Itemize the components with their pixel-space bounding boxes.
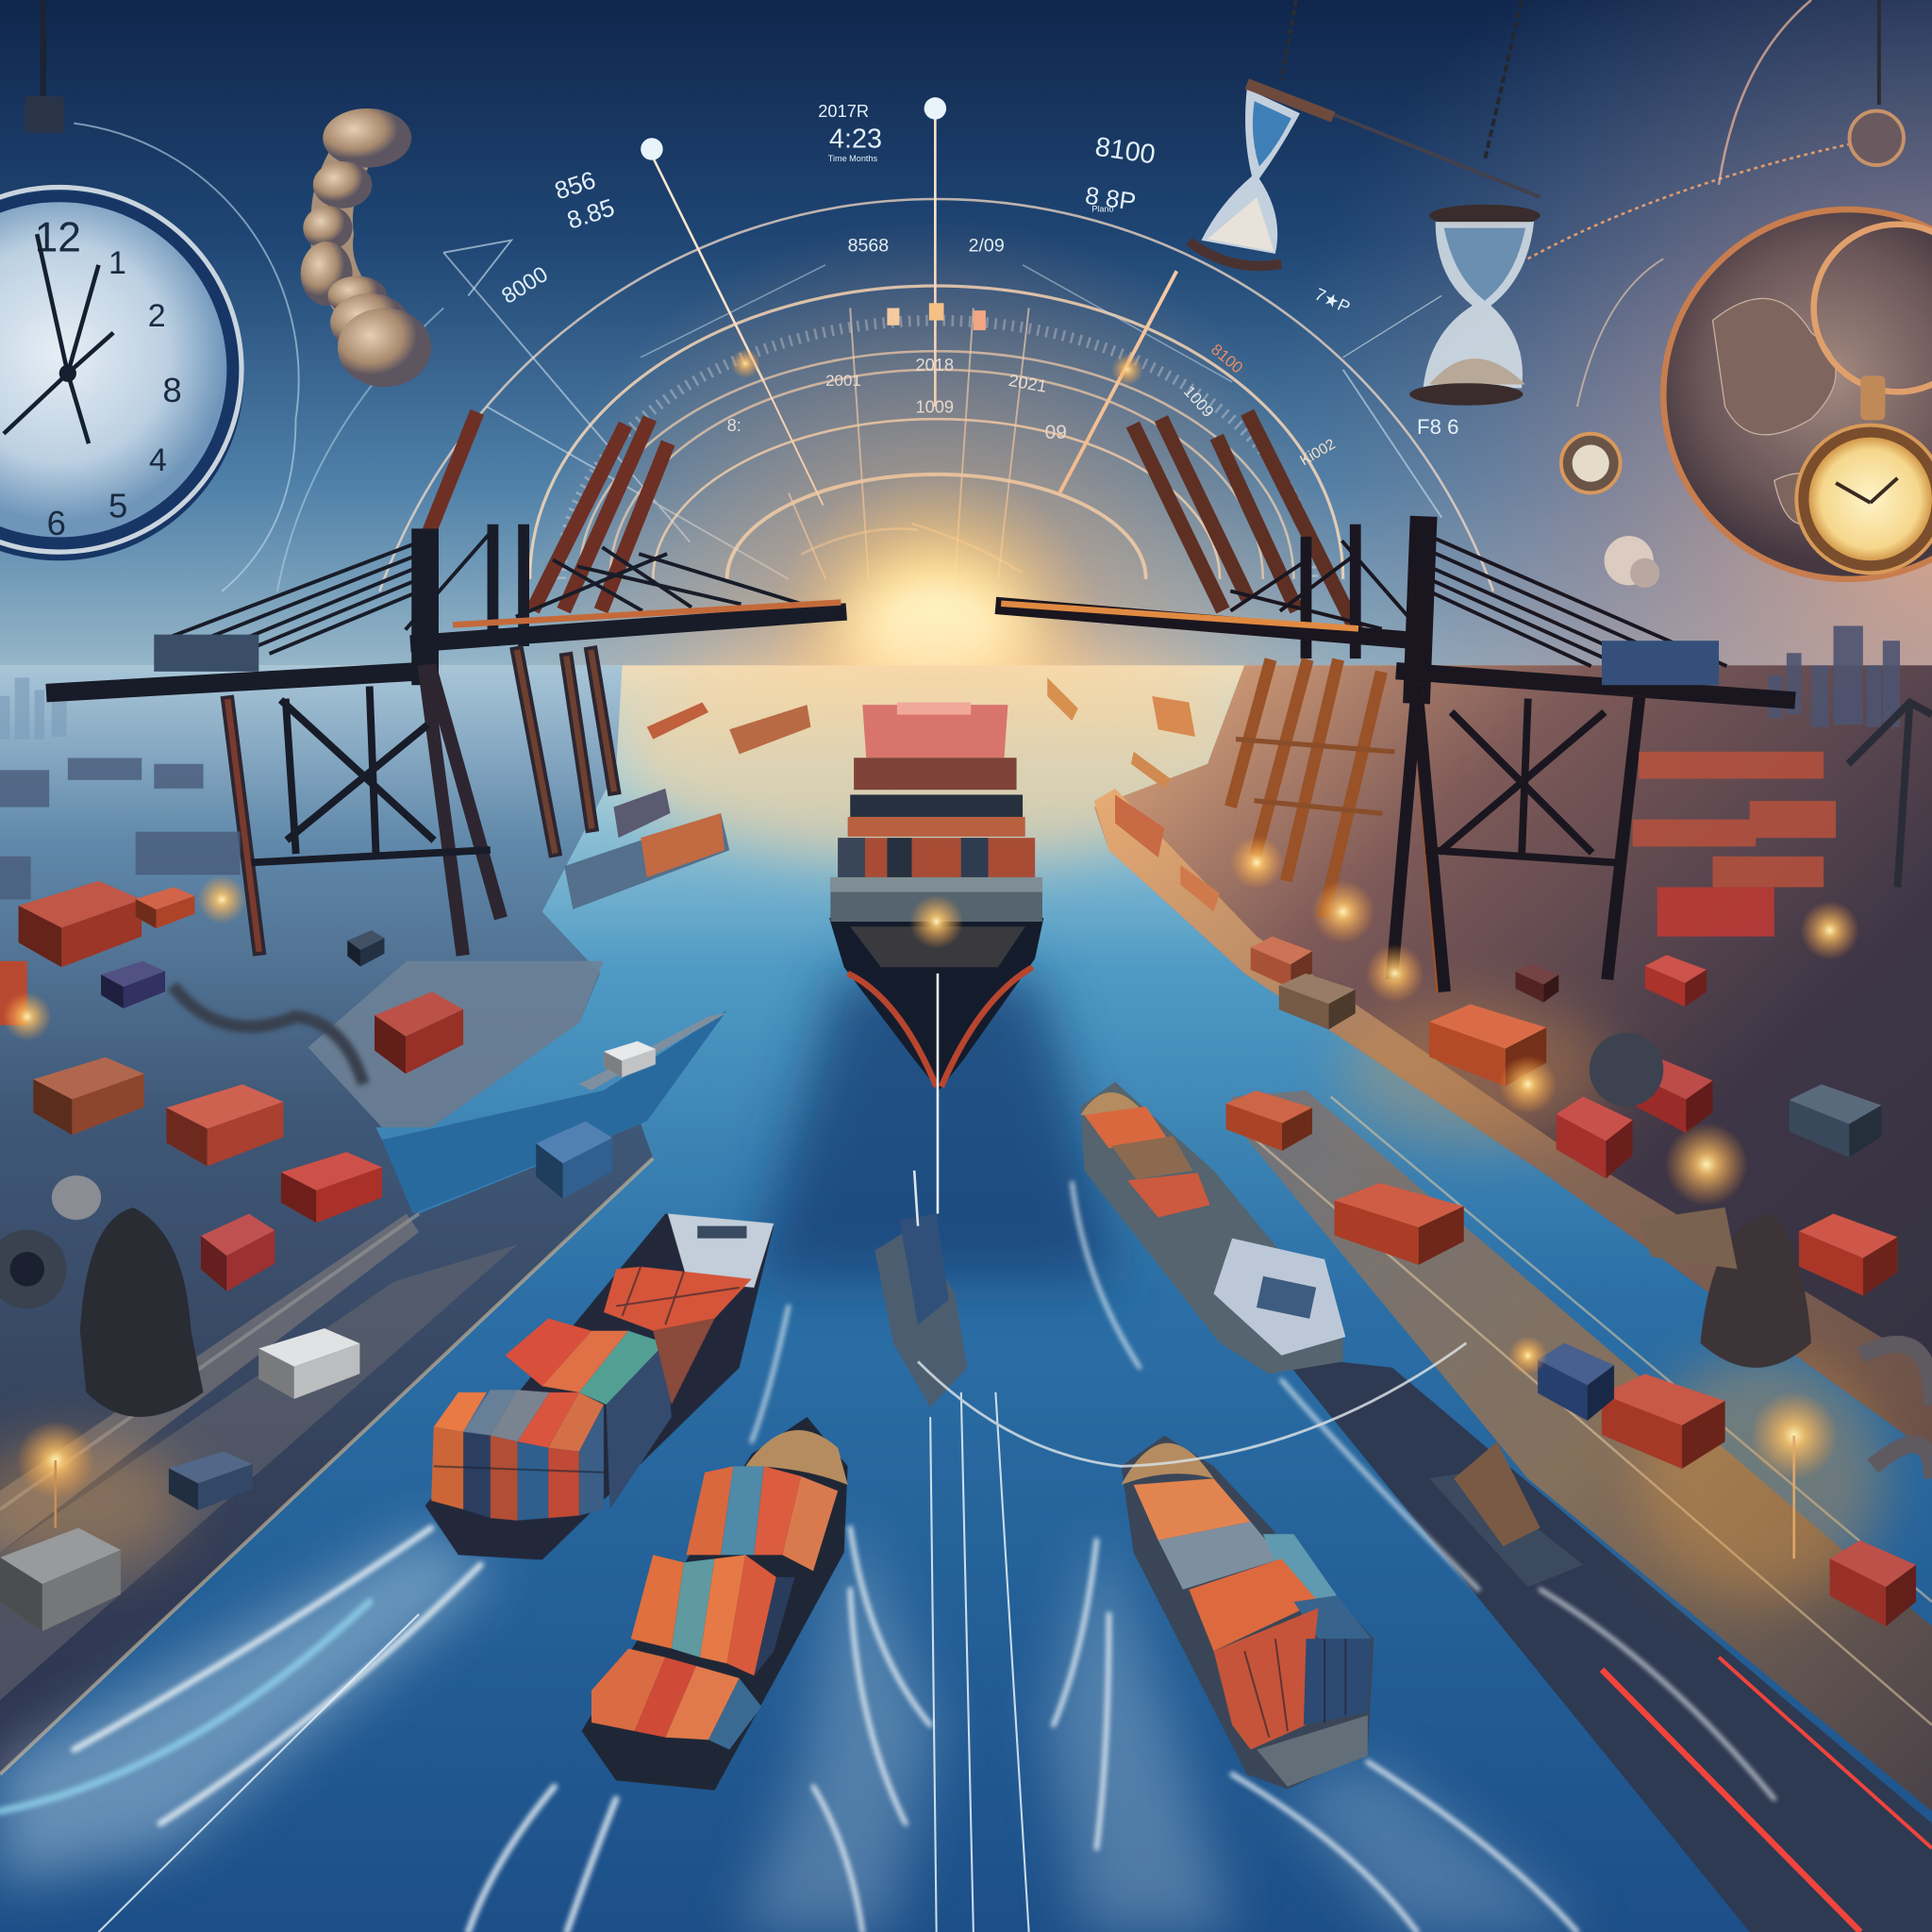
sky background — [0, 0, 1932, 690]
timeline labels: 8568 — [848, 235, 889, 256]
icon: tilted hourglass — [1189, 0, 1541, 266]
icon: small stopwatch — [1561, 434, 1621, 492]
timeline labels: 8100 — [1093, 132, 1158, 170]
right crane — [1004, 419, 1787, 986]
icon: world globe dial — [1663, 0, 1932, 579]
city skyline right — [1768, 626, 1900, 727]
timeline labels: 7★P — [1312, 284, 1354, 317]
left clock: 6 — [47, 504, 66, 542]
sun glow — [518, 216, 1356, 1054]
timeline labels: 856 — [551, 165, 599, 205]
icon: abstract twisted shape — [301, 108, 431, 387]
timeline labels: 8: — [727, 415, 741, 435]
guide lines on water — [98, 1343, 1466, 1932]
left clock — [0, 0, 299, 591]
timeline labels: F8 6 — [1417, 415, 1458, 439]
right quay — [1094, 665, 1932, 1932]
lower centre right ship — [1122, 1436, 1374, 1789]
right cargo containers — [1226, 937, 1916, 1626]
upper right ship — [1080, 1082, 1345, 1374]
foam wakes behind ships — [0, 1516, 1590, 1932]
left clock: 1 — [108, 245, 126, 281]
icon: smoke puff — [1605, 536, 1659, 588]
right orbit lines — [1343, 0, 1860, 407]
left clock: 2 — [148, 298, 166, 334]
timeline labels: 2/09 — [969, 235, 1005, 256]
left quay — [0, 665, 727, 1774]
right yard stacks — [1633, 752, 1836, 937]
timeline labels: 4:23 — [829, 125, 882, 155]
timeline labels: Time Months — [828, 154, 878, 163]
small central tug — [874, 1171, 967, 1407]
ship wakes — [0, 1183, 1774, 1932]
distant barges — [564, 677, 1220, 912]
timeline labels: Ki002 — [1297, 436, 1339, 469]
lower left ship — [425, 1214, 774, 1560]
timeline labels: 1009 — [1180, 382, 1217, 421]
water — [0, 641, 1932, 1932]
timeline labels — [497, 101, 1458, 469]
small right tug — [1429, 1441, 1583, 1587]
timeline labels: 09 — [1045, 422, 1067, 443]
quay lamps — [3, 836, 1859, 1558]
timeline labels: 8000 — [497, 261, 552, 308]
timeline labels: 8100 — [1208, 341, 1246, 377]
lower centre left ship — [581, 1417, 848, 1790]
timeline labels: Plano — [1091, 205, 1114, 214]
timeline pins — [641, 97, 1176, 506]
timeline labels: 8 8P — [1084, 181, 1138, 216]
icon: upright hourglass — [1409, 0, 1541, 406]
timeline labels: 1009 — [915, 397, 954, 417]
left clock: 4 — [149, 442, 167, 478]
timeline labels: 8.85 — [563, 192, 618, 235]
left clock: 12 — [35, 214, 81, 260]
city skyline left — [0, 677, 67, 740]
far left yard — [0, 758, 241, 899]
right machinery — [1590, 702, 1932, 1478]
timeline labels: 2017R — [818, 101, 869, 121]
icon: pocket watch — [1796, 375, 1932, 573]
red light streaks — [1602, 1657, 1932, 1932]
left machinery — [0, 961, 363, 1417]
timeline labels: 2021 — [1008, 370, 1048, 396]
left cargo containers — [0, 881, 656, 1631]
left clock: 8 — [162, 371, 182, 409]
left clock: 5 — [108, 487, 127, 525]
left crane — [56, 419, 838, 949]
main container ship — [829, 702, 1043, 1214]
timeline labels: 2001 — [825, 372, 861, 390]
timeline arcs — [277, 199, 1493, 591]
timeline labels: 2018 — [915, 355, 954, 375]
